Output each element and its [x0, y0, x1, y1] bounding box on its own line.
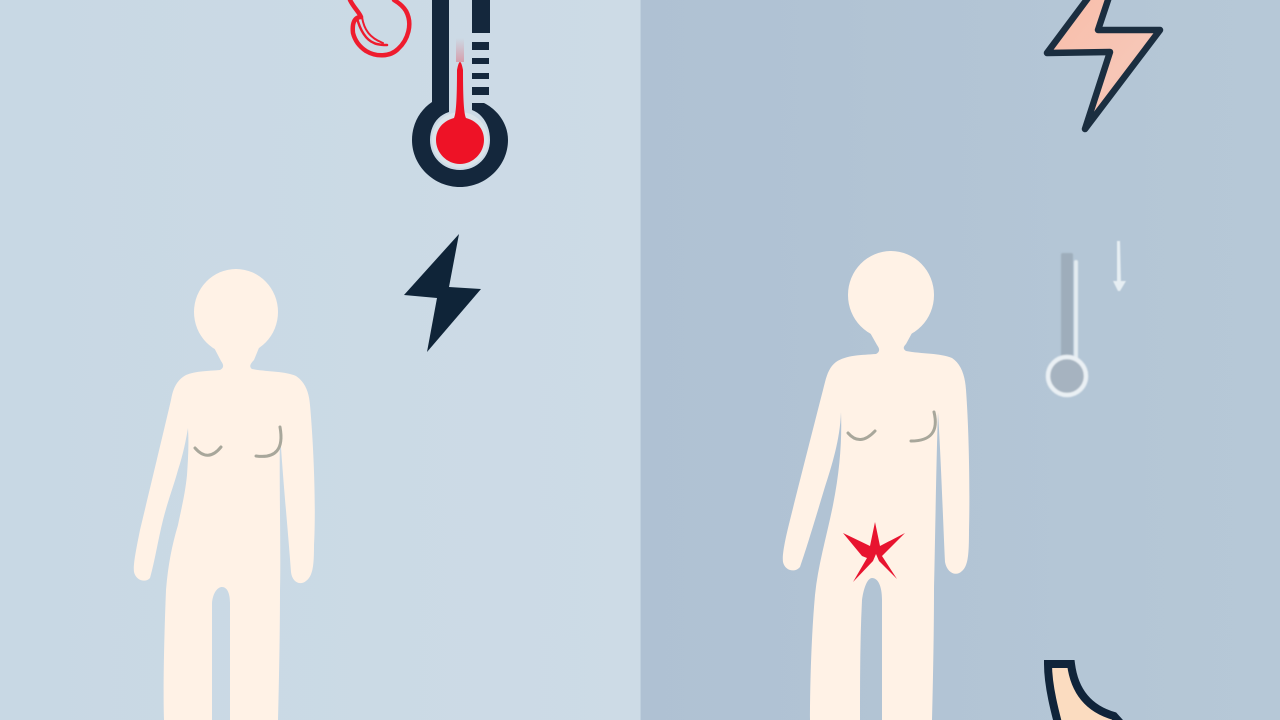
icon: hot thermometer [412, 0, 508, 187]
icon: dark lightning bolt [404, 234, 481, 352]
thermometer scale ticks [472, 42, 489, 95]
chest line: left [195, 447, 221, 455]
thermometer bulb [1048, 357, 1086, 395]
thermometer highlight [1074, 260, 1078, 366]
icon: curved tube [1048, 664, 1140, 720]
figure: left body [134, 269, 315, 720]
figure: right body [783, 251, 969, 720]
chest line: right [256, 427, 281, 456]
thermometer body [412, 0, 508, 187]
thermometer right wall [472, 0, 490, 33]
chest line: left [848, 431, 875, 440]
panel: left [0, 0, 640, 720]
thermometer tube [1061, 253, 1073, 365]
figure torso and limbs: right [783, 322, 969, 720]
icon: cold thermometer [1048, 253, 1086, 395]
icon: red pain star [843, 522, 905, 582]
panel background: right [641, 0, 1280, 720]
thermometer bulb ring [432, 112, 488, 168]
figure head: left [194, 269, 278, 355]
chest line: right [911, 412, 935, 441]
thermometer mercury [436, 62, 484, 164]
panel: right [641, 0, 1280, 720]
thermometer mercury glow [456, 38, 464, 62]
figure head: right [848, 251, 934, 339]
icon: down arrow [1113, 241, 1126, 291]
figure torso and limbs: left [134, 338, 315, 720]
panel background: left [0, 0, 640, 720]
icon: peach lightning bolt [1047, 0, 1160, 129]
icon: red droplet outline [350, 0, 409, 55]
